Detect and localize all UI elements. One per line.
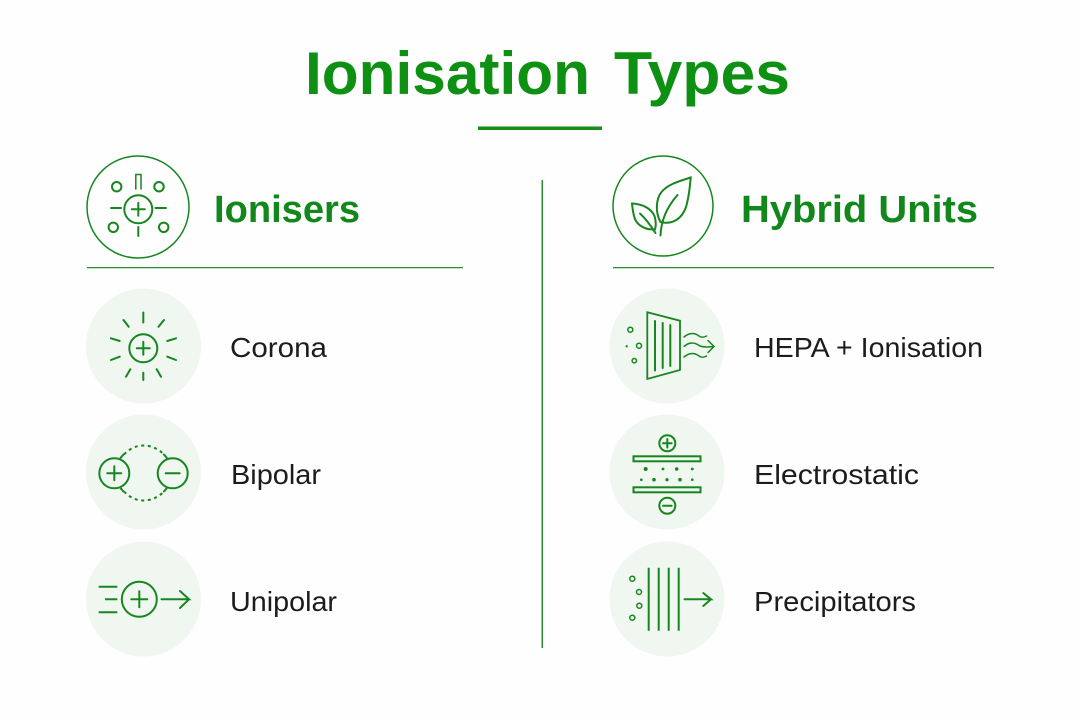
label: electrostatic: Electrostatic [754, 459, 919, 490]
title [305, 40, 790, 107]
icon: corona [86, 288, 201, 404]
icon: ioniser header [87, 156, 189, 258]
heading: ionisers: Ionisers [214, 189, 360, 231]
icon: precipitator [610, 542, 724, 656]
centre divider [542, 180, 543, 648]
label: corona: Corona [230, 332, 328, 363]
label: hepa + ionisation: HEPA + Ionisation [754, 332, 983, 363]
title underline [478, 126, 602, 130]
icon: bipolar [86, 414, 201, 530]
heading: hybrid units: Hybrid Units [741, 189, 978, 231]
icon: hepa filter [610, 288, 724, 404]
item: hepa + ionisation [610, 288, 983, 404]
title: Ionisation [305, 40, 590, 107]
item: precipitators [610, 542, 916, 656]
label: bipolar: Bipolar [231, 459, 321, 490]
icon: leaves [613, 156, 713, 256]
title: Types [614, 40, 790, 107]
item: electrostatic [610, 414, 919, 530]
item: unipolar [86, 542, 337, 656]
heading rule [87, 267, 463, 268]
item: corona [86, 288, 328, 404]
panel: hybrid units [610, 156, 994, 656]
icon: unipolar [86, 542, 201, 656]
icon: electrostatic plates [610, 414, 724, 530]
label: precipitators: Precipitators [754, 586, 916, 617]
heading rule [613, 267, 994, 268]
label: unipolar: Unipolar [230, 586, 337, 617]
panel: ionisers [86, 156, 463, 656]
item: bipolar [86, 414, 321, 530]
